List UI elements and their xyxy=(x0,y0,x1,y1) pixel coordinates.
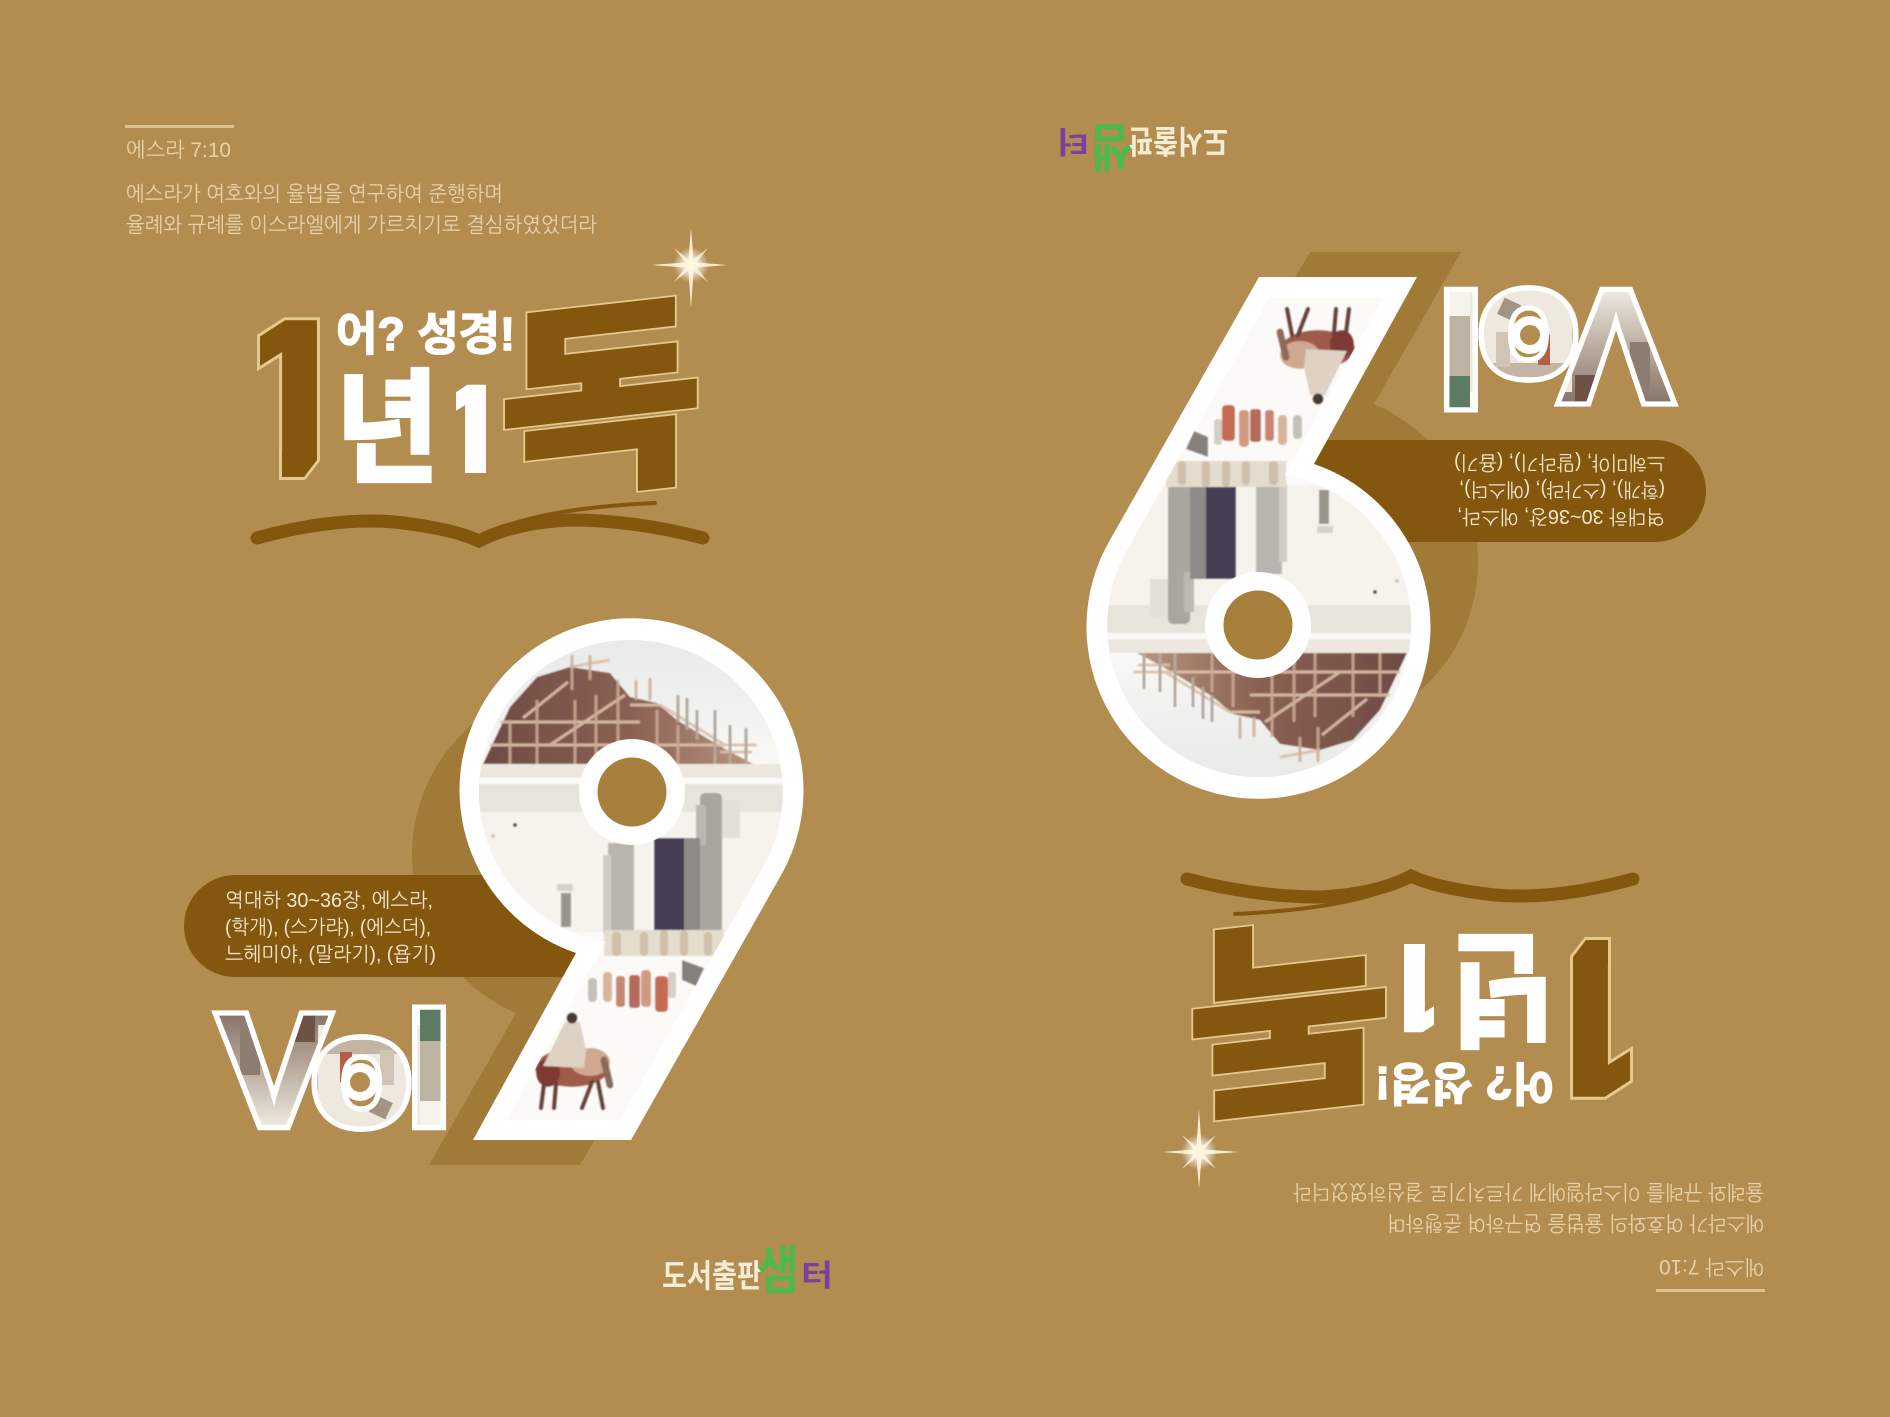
white 년: 년 xyxy=(336,361,439,498)
publisher logo: 샘 xyxy=(757,1243,799,1301)
icon: sparkle star rotated xyxy=(1163,1109,1239,1189)
title rotated: 1년1독 xyxy=(1188,889,1658,1144)
publisher logo xyxy=(662,1243,833,1301)
subtitle rotated: 어? 성경! xyxy=(1375,1057,1554,1109)
publisher logo rotated xyxy=(1057,116,1228,174)
info pill rotated: 역대하 30~36장, 에스라, xyxy=(1457,505,1665,527)
info pill: 역대하 30~36장, 에스라, xyxy=(225,890,433,912)
icon: open book line rotated xyxy=(1187,876,1633,914)
verse block: 에스라 7:10 xyxy=(126,139,231,162)
info pill rotated: 느헤미야, (말라기), (욥기) xyxy=(1454,451,1665,473)
Vol lettering: Vol xyxy=(218,981,446,1159)
big hangul 독: 독 xyxy=(500,277,702,528)
subtitle 어? 성경!: 어? 성경! xyxy=(336,308,515,360)
big hangul 독 rotated: 독 xyxy=(1188,889,1390,1140)
publisher logo rotated: 도서출판 xyxy=(1128,123,1228,159)
info pill: 느헤미야, (말라기), (욥기) xyxy=(225,944,436,966)
info pill xyxy=(184,875,590,977)
numeral 9 shadow xyxy=(412,683,756,1165)
icon: sparkle star xyxy=(651,228,727,308)
publisher logo: 터 xyxy=(801,1260,833,1293)
verse block xyxy=(125,125,597,237)
Vol lettering xyxy=(211,1004,446,1132)
verse block rotated: 에스라 7:10 xyxy=(1659,1255,1764,1278)
info pill rotated xyxy=(1300,440,1706,542)
numeral 6 shadow xyxy=(1134,252,1478,734)
info pill: (학개), (스가랴), (에스더), xyxy=(225,917,431,939)
publisher logo: 도서출판 xyxy=(662,1258,762,1294)
white small 1: 1 xyxy=(438,361,508,500)
left cover panel xyxy=(125,125,833,1301)
icon: open book line xyxy=(257,503,703,541)
big numeral 1 xyxy=(257,317,320,480)
right cover panel (rotated 180 degrees) xyxy=(1057,116,1765,1292)
title: 1년1독 xyxy=(232,273,702,528)
publisher logo rotated: 터 xyxy=(1057,124,1089,157)
white 년 rotated: 년 xyxy=(1451,919,1554,1056)
white small 1 rotated: 1 xyxy=(1382,917,1452,1056)
big numeral 1 rotated xyxy=(1570,937,1633,1100)
big numeral 1: 1 xyxy=(232,273,357,525)
verse block: 에스라가 여호와의 율법을 연구하여 준행하며 xyxy=(126,183,503,206)
numeral 6 with photo xyxy=(1086,277,1430,799)
publisher logo rotated: 샘 xyxy=(1091,116,1133,174)
verse block rotated: 에스라가 여호와의 율법을 연구하여 준행하며 xyxy=(1387,1211,1764,1234)
Vol lettering rotated: Vol xyxy=(1444,258,1672,436)
info pill rotated: (학개), (스가랴), (에스더), xyxy=(1459,478,1665,500)
verse block rotated: 율례와 규례를 이스라엘에게 가르치기로 결심하였었더라 xyxy=(1293,1180,1764,1203)
numeral 9 with photo xyxy=(460,618,804,1140)
big hangul 독 rotated: 독 xyxy=(1188,889,1390,1140)
big numeral 1: 1 xyxy=(232,273,357,525)
big numeral 1 rotated: 1 xyxy=(1533,892,1658,1144)
verse block: 율례와 규례를 이스라엘에게 가르치기로 결심하였었더라 xyxy=(126,214,597,237)
big hangul 독: 독 xyxy=(500,277,702,528)
verse block rotated xyxy=(1293,1180,1765,1292)
Vol lettering rotated xyxy=(1444,285,1679,412)
big numeral 1 rotated: 1 xyxy=(1533,892,1658,1144)
